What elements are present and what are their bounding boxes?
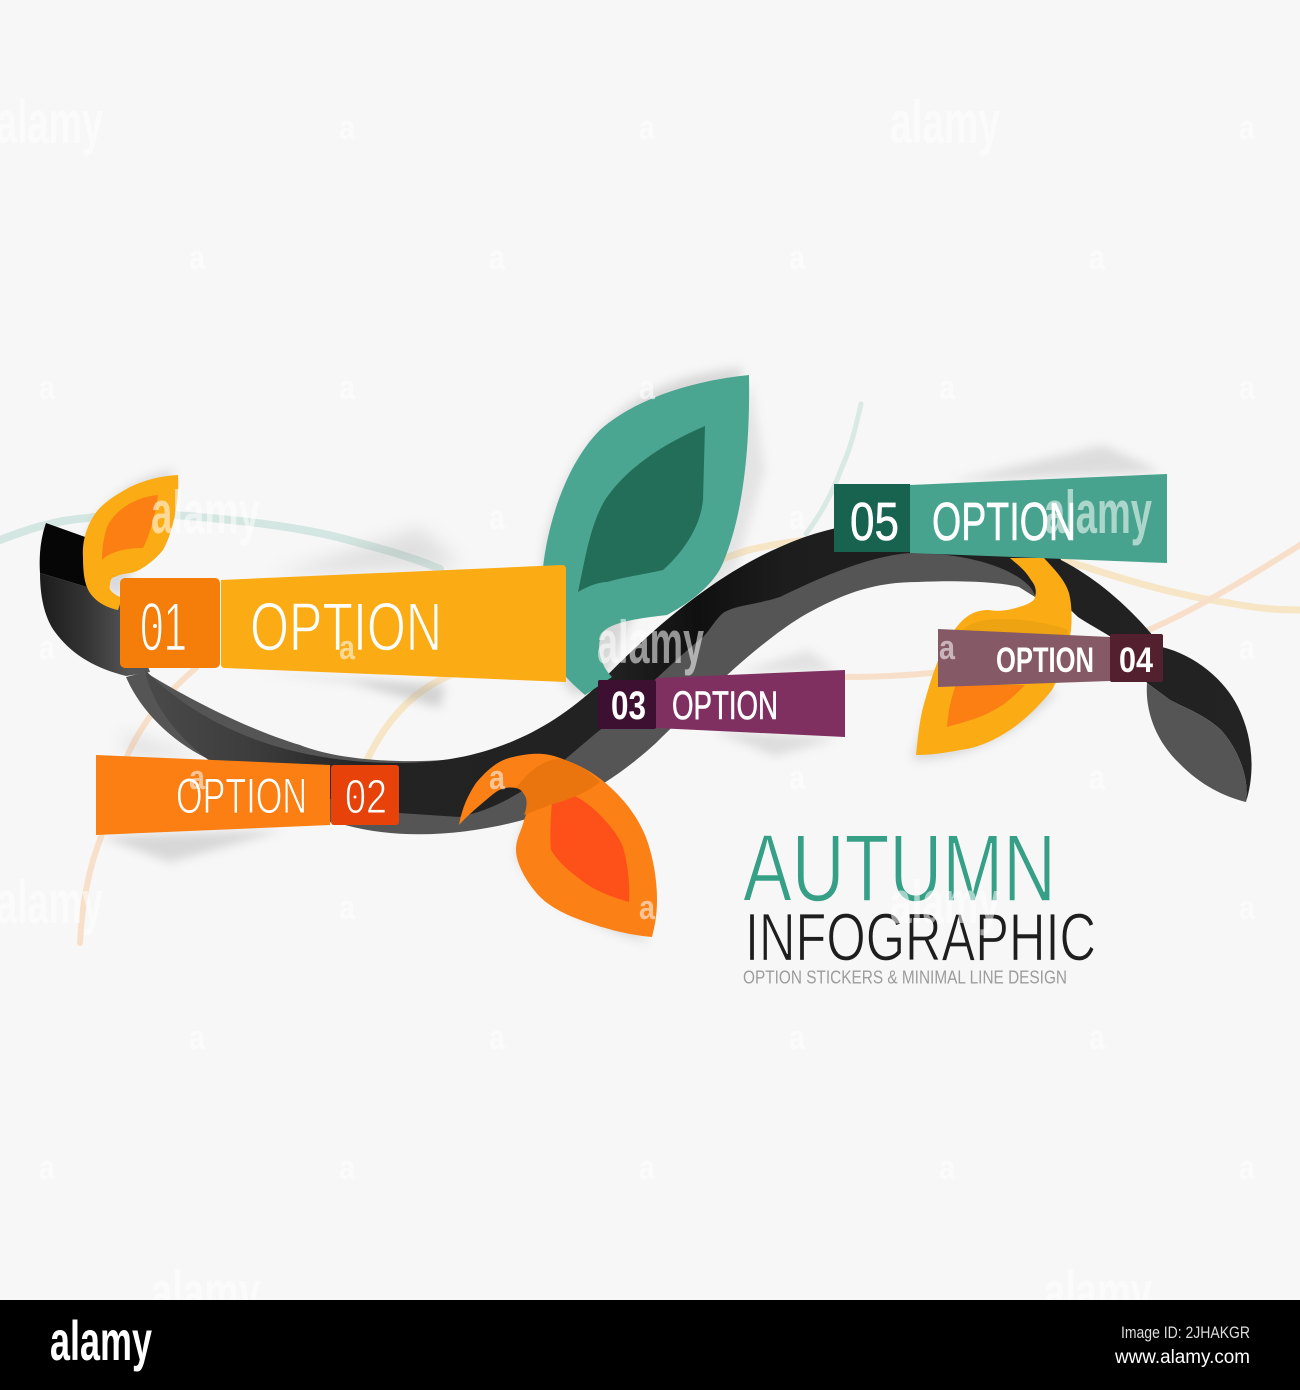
stock watermarks: alamy — [151, 1259, 260, 1326]
stock watermarks: a — [1239, 369, 1256, 407]
ribbon: dark main band — [145, 515, 1252, 817]
stock watermarks: a — [939, 369, 956, 407]
stock watermarks: a — [1239, 1149, 1256, 1187]
stock watermarks: a — [339, 369, 356, 407]
stock watermarks: a — [939, 1149, 956, 1187]
sticker 01 band — [221, 565, 566, 682]
stock watermarks: alamy — [0, 869, 103, 936]
stock watermarks: a — [1089, 759, 1106, 797]
sticker 05 label: OPTION — [932, 492, 1076, 552]
stock watermarks: a — [39, 369, 56, 407]
stock watermarks: a — [339, 1149, 356, 1187]
stock watermarks: a — [189, 239, 206, 277]
stock watermarks: a — [1239, 109, 1256, 147]
sticker 05 number: 05 — [850, 492, 899, 552]
stock watermarks: a — [939, 629, 956, 667]
sticker 02 number box — [331, 765, 399, 825]
stock watermarks: alamy — [1044, 479, 1152, 546]
sticker 04 label: OPTION — [996, 641, 1094, 680]
stock watermarks: a — [1239, 629, 1256, 667]
sticker 01 number box — [120, 578, 220, 668]
sticker 02 — [96, 755, 399, 835]
stock watermarks: a — [1239, 889, 1256, 927]
teal leaf — [541, 375, 749, 695]
website: www.alamy.com — [1114, 1347, 1250, 1368]
image id: Image ID: 2JHAKGR — [1121, 1323, 1250, 1342]
alamy logo: alamy — [50, 1309, 152, 1372]
black swoosh ribbon — [40, 515, 1252, 834]
sticker 03 band — [656, 670, 845, 737]
sticker 05 number box — [834, 484, 910, 552]
stock watermarks: a — [189, 759, 206, 797]
sticker 03 label: OPTION — [672, 684, 778, 728]
thin decorative curved lines — [0, 404, 1300, 943]
stock watermarks: a — [639, 1149, 656, 1187]
ribbon: left crescent black tip — [40, 523, 88, 587]
small yellow leaf top left — [83, 475, 178, 610]
stock watermarks: a — [1089, 239, 1106, 277]
subtitle: OPTION STICKERS & MINIMAL LINE DESIGN — [743, 966, 1067, 988]
sticker 02 band — [96, 755, 330, 835]
stock watermarks: a — [489, 1019, 506, 1057]
stock watermarks: alamy — [1044, 1259, 1152, 1326]
title block — [743, 815, 1096, 988]
stock watermarks: a — [639, 109, 656, 147]
stock watermarks: alamy — [890, 869, 1000, 936]
stock watermarks: a — [489, 239, 506, 277]
stock watermarks: a — [189, 1019, 206, 1057]
stock watermarks: a — [639, 369, 656, 407]
stock watermarks: a — [789, 1019, 806, 1057]
sticker 01 — [120, 565, 566, 682]
sticker 04 number: 04 — [1119, 641, 1153, 680]
stock watermarks: a — [339, 889, 356, 927]
sticker 03 number: 03 — [611, 684, 646, 728]
soft sticker and leaf shadows — [78, 368, 1162, 943]
stock watermarks: a — [339, 109, 356, 147]
large orange leaf bottom — [459, 754, 657, 937]
stock watermarks: a — [789, 499, 806, 537]
ribbon: gray lower band — [126, 545, 1035, 834]
stock watermarks: alamy — [890, 89, 1000, 156]
stock watermarks: a — [339, 629, 356, 667]
stock watermarks: a — [489, 759, 506, 797]
title: infographic: INFOGRAPHIC — [745, 900, 1096, 976]
title: autumn: AUTUMN — [743, 815, 1056, 922]
sticker 02 number: 02 — [345, 771, 387, 824]
sticker 05 — [834, 474, 1167, 563]
stock watermarks: a — [39, 629, 56, 667]
stock watermarks: a — [1089, 1019, 1106, 1057]
ribbon: gray end leaf — [1147, 683, 1247, 802]
sticker 02 zero dot — [354, 796, 356, 798]
sticker 03 — [598, 670, 845, 737]
sticker 04 number box — [1110, 634, 1163, 682]
stock watermarks: alamy — [597, 609, 704, 676]
stock watermarks: a — [789, 759, 806, 797]
stock watermarks: alamy — [0, 89, 103, 156]
sticker 04 — [938, 629, 1163, 687]
sticker 01 zero dot — [153, 624, 157, 628]
stock watermarks: a — [789, 239, 806, 277]
sticker 01 label: OPTION — [250, 588, 442, 666]
sticker 04 band — [938, 629, 1110, 687]
ribbon: left crescent lower — [40, 573, 150, 676]
stock watermarks: a — [39, 1149, 56, 1187]
stock watermarks: a — [489, 499, 506, 537]
yellow leaf right — [916, 558, 1072, 755]
stock watermarks: a — [639, 889, 656, 927]
stock watermarks: alamy — [151, 479, 260, 546]
sticker 02 label: OPTION — [176, 768, 307, 824]
sticker 05 band — [910, 474, 1167, 563]
sticker 03 number box — [598, 680, 656, 729]
bottom black bar — [0, 1300, 1300, 1390]
sticker 01 number: 01 — [140, 588, 187, 666]
